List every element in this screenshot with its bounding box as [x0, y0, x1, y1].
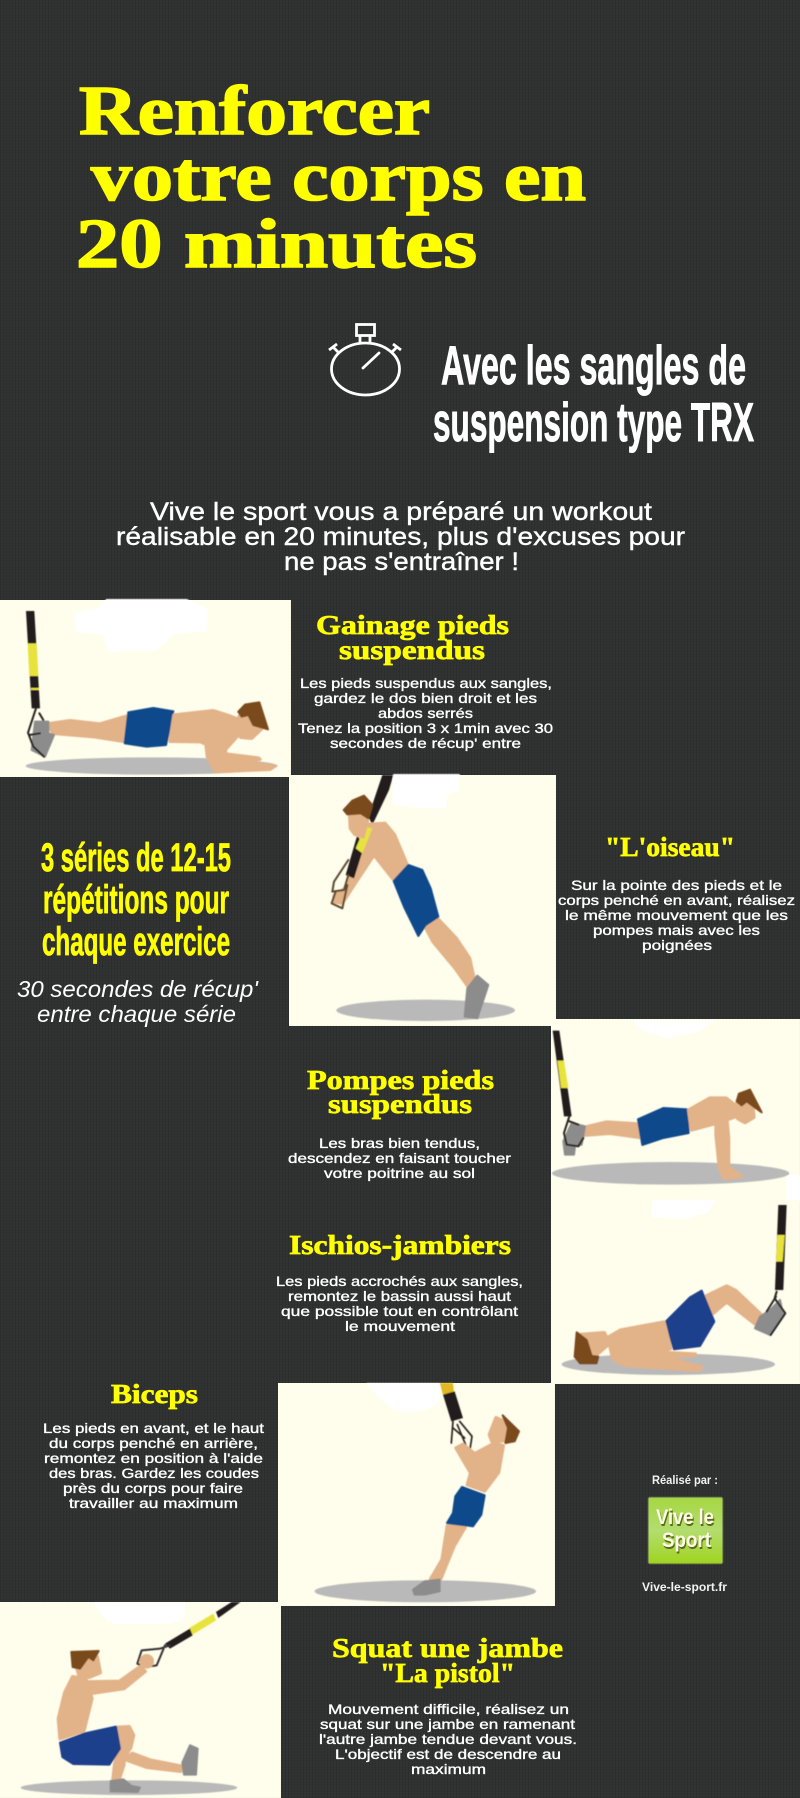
- description: L'objectif est de descendre au: [335, 1746, 561, 1762]
- series callout: chaque exercice: [42, 920, 230, 964]
- description: Les pieds suspendus aux sangles,: [300, 675, 552, 691]
- panel: l'oiseau: [289, 775, 795, 1026]
- panel: gainage pieds suspendus: [0, 600, 553, 777]
- description: [319, 1701, 577, 1777]
- logo: Vive le Sport: [648, 1497, 723, 1564]
- panel: séries et récupération: [17, 836, 260, 1027]
- panel: biceps: [43, 1379, 555, 1606]
- title: 20 minutes: [76, 206, 477, 283]
- title: Renforcer: [79, 73, 430, 150]
- description: [298, 675, 553, 751]
- heading: suspendus: [339, 635, 485, 665]
- title: votre corps en: [91, 139, 586, 216]
- description: [43, 1420, 264, 1511]
- series callout: [41, 836, 231, 964]
- description: Mouvement difficile, réalisez un: [328, 1701, 569, 1717]
- intro text: réalisable en 20 minutes, plus d'excuses pour: [116, 523, 685, 551]
- description: pompes mais avec les: [593, 922, 760, 938]
- website: Vive-le-sport.fr: [642, 1582, 728, 1594]
- description: gardez le dos bien droit et les: [314, 690, 537, 706]
- description: Les pieds accrochés aux sangles,: [276, 1273, 523, 1289]
- logo: Vive le Sport: Vive le: [656, 1506, 714, 1529]
- illustration: plank with feet suspended: [0, 600, 291, 777]
- description: abdos serrés: [378, 705, 473, 721]
- credit label: Réalisé par :: [652, 1475, 718, 1487]
- description: du corps penché en arrière,: [49, 1435, 258, 1451]
- panel: ischios-jambiers: [276, 1200, 800, 1384]
- heading: "L'oiseau": [605, 832, 735, 862]
- panel: squat une jambe: [0, 1602, 577, 1798]
- description: travailler au maximum: [69, 1495, 238, 1511]
- illustration: biceps curl: [278, 1383, 555, 1606]
- heading: [316, 610, 509, 665]
- description: remontez le bassin aussi haut: [288, 1288, 511, 1304]
- heading: [307, 1065, 494, 1119]
- description: maximum: [411, 1761, 486, 1777]
- description: [276, 1273, 523, 1334]
- description: remontez en position à l'aide: [44, 1450, 263, 1466]
- logo: Vive le Sport: Sport: [663, 1531, 712, 1554]
- rest note: entre chaque série: [37, 1001, 236, 1027]
- logo: Vive le Sport: Sport: [662, 1529, 711, 1552]
- description: [558, 877, 795, 953]
- series callout: 3 séries de 12-15: [41, 836, 231, 880]
- illustration: leaning chest press: [289, 775, 556, 1026]
- description: votre poitrine au sol: [324, 1165, 475, 1181]
- description: corps penché en avant, réalisez: [558, 892, 795, 908]
- title: [76, 73, 586, 283]
- heading: Ischios-jambiers: [289, 1230, 511, 1260]
- description: [288, 1135, 511, 1181]
- illustration: pistol squat: [0, 1602, 281, 1798]
- logo: Vive le Sport: Vive le: [657, 1508, 715, 1531]
- heading: Biceps: [111, 1379, 198, 1409]
- rest note: [17, 976, 260, 1027]
- intro text: ne pas s'entraîner !: [284, 548, 519, 576]
- heading: suspendus: [328, 1089, 472, 1119]
- panel: pompes pieds suspendus: [288, 1019, 800, 1202]
- illustration: hip bridge: [551, 1200, 800, 1384]
- intro text: [116, 498, 685, 576]
- series callout: répétitions pour: [43, 878, 229, 922]
- description: le mouvement: [345, 1318, 455, 1334]
- description: près du corps pour faire: [63, 1480, 243, 1496]
- description: secondes de récup' entre: [330, 735, 521, 751]
- heading: [332, 1633, 563, 1688]
- subtitle: TRX straps: [433, 334, 754, 453]
- description: le même mouvement que les: [565, 907, 788, 923]
- heading: Gainage pieds: [316, 610, 509, 640]
- description: que possible tout en contrôlant: [281, 1303, 518, 1319]
- illustration: push-up with feet suspended: [551, 1019, 800, 1202]
- rest note: 30 secondes de récup': [17, 976, 260, 1002]
- description: descendez en faisant toucher: [288, 1150, 511, 1166]
- description: Tenez la position 3 x 1min avec 30: [298, 720, 553, 736]
- description: poignées: [642, 937, 712, 953]
- description: des bras. Gardez les coudes: [49, 1465, 259, 1481]
- description: l'autre jambe tendue devant vous.: [319, 1731, 577, 1747]
- credit block: [642, 1475, 728, 1594]
- description: Les bras bien tendus,: [319, 1135, 480, 1151]
- icon: stopwatch: [329, 324, 401, 395]
- description: squat sur une jambe en ramenant: [320, 1716, 575, 1732]
- heading: Pompes pieds: [307, 1065, 494, 1095]
- description: Sur la pointe des pieds et le: [571, 877, 782, 893]
- heading: Squat une jambe: [332, 1633, 563, 1663]
- intro text: Vive le sport vous a préparé un workout: [150, 498, 652, 526]
- description: Les pieds en avant, et le haut: [43, 1420, 264, 1436]
- heading: "La pistol": [380, 1658, 515, 1688]
